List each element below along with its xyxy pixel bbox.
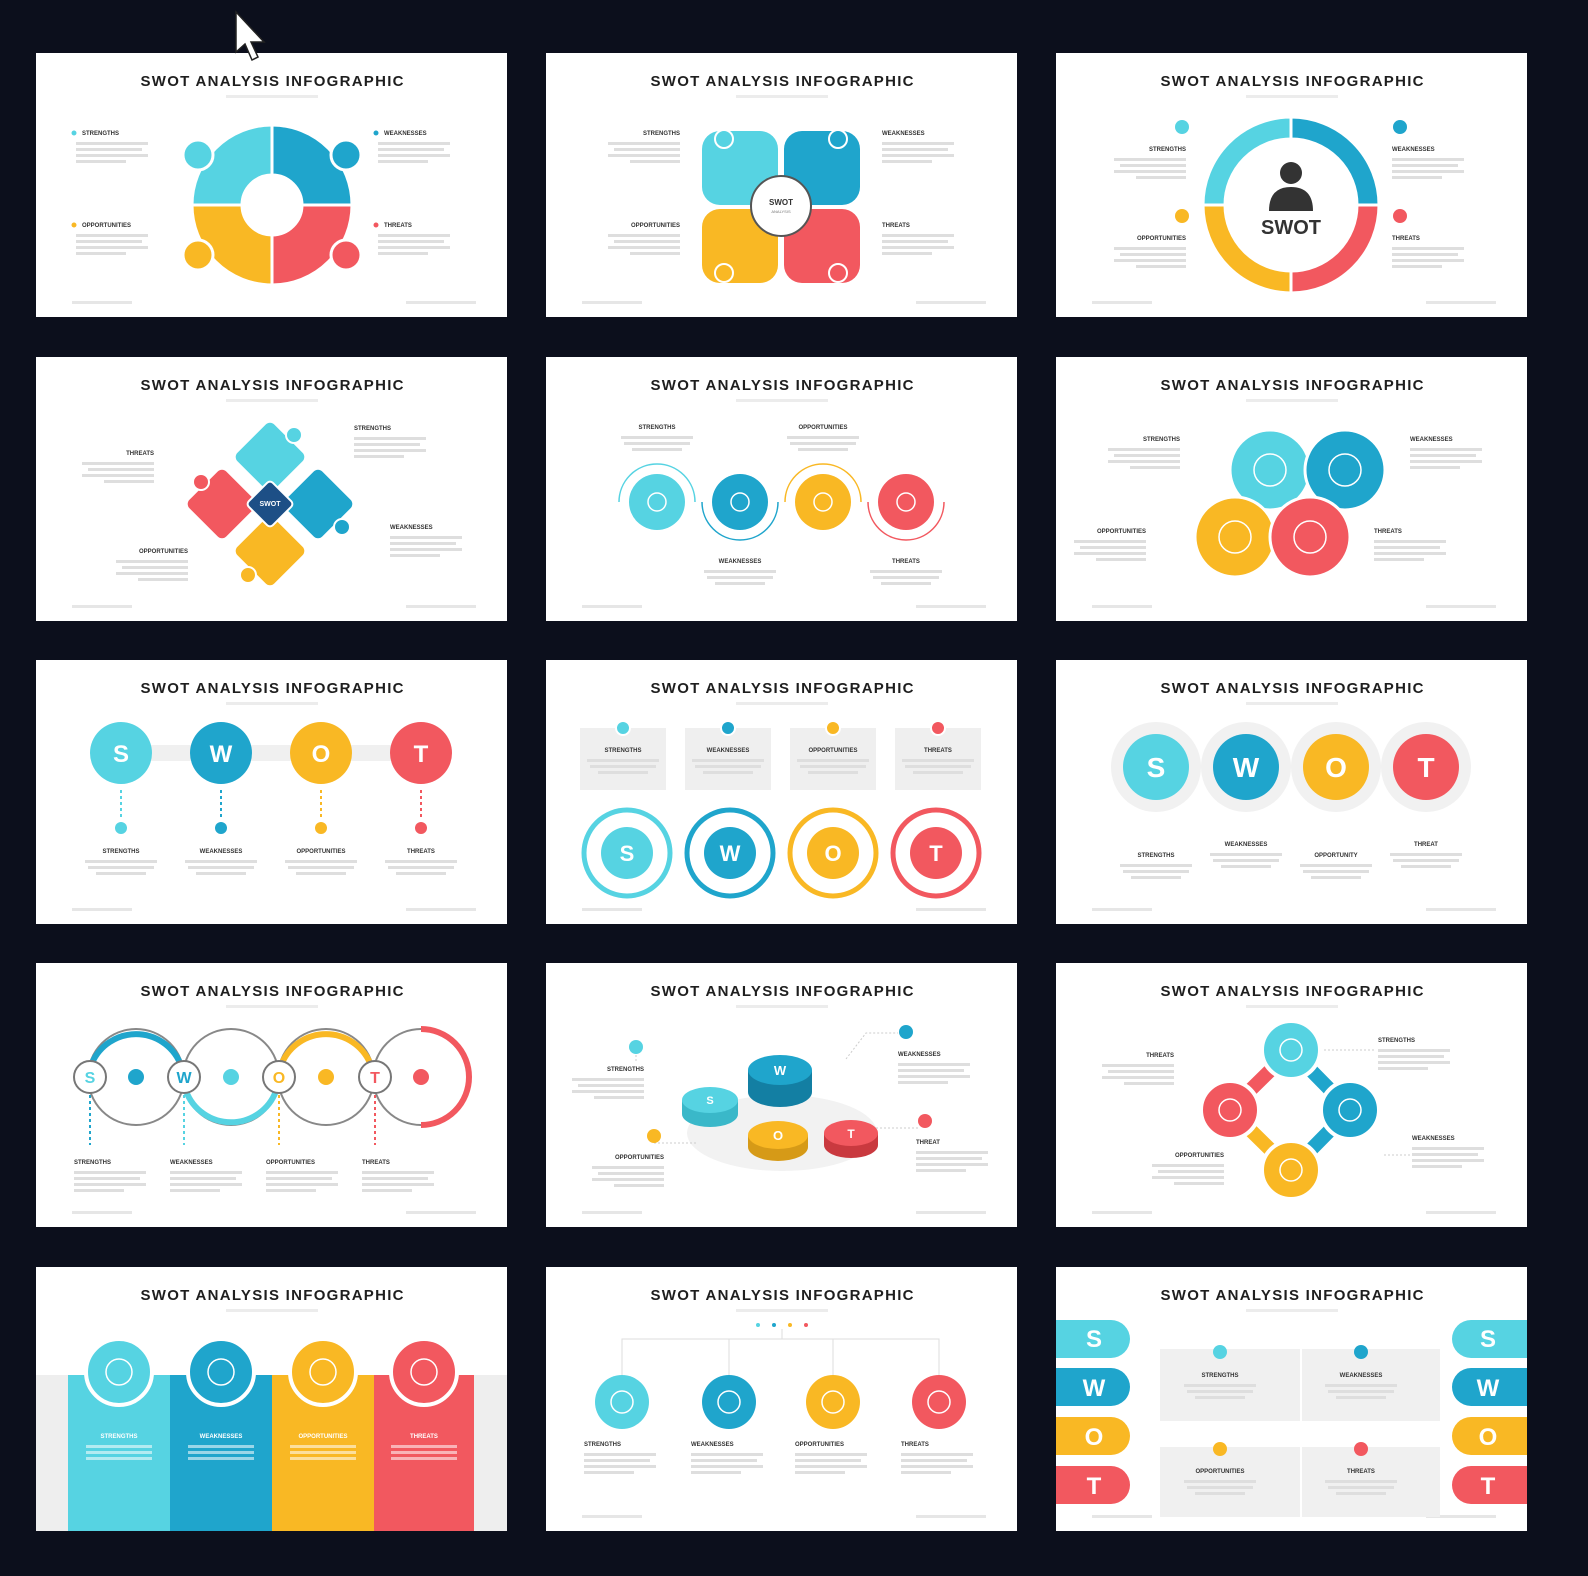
slide 3: ring with person: STRENGTHS <box>1149 147 1186 153</box>
slide 8: boxes and ring circles: OPPORTUNITIES <box>808 748 858 754</box>
slide 12: four connected circles: THREATS <box>1146 1053 1174 1059</box>
slide 13: colored columns <box>36 1267 507 1531</box>
slide 7: SWOT circles with dotted arrows: WEAKNESSES <box>200 849 242 855</box>
slide 9: SWOT circles with halo: WEAKNESSES <box>1225 842 1267 848</box>
slide 2: puzzle squares: SWOT <box>769 198 793 207</box>
slide 6: overlapping circles: OPPORTUNITIES <box>1097 529 1146 535</box>
slide 10: chained rings: S <box>85 1070 96 1087</box>
slide 9: SWOT circles with halo: STRENGTHS <box>1137 853 1175 859</box>
slide 12: four connected circles: SWOT ANALYSIS INFOGRAPHIC <box>1160 983 1424 1000</box>
slide 11: 3D coins: THREAT <box>916 1140 940 1146</box>
slide 15: pills and boxes: O <box>1479 1424 1497 1451</box>
slide 8: boxes and ring circles: WEAKNESSES <box>707 748 749 754</box>
slide 9: SWOT circles with halo: SWOT ANALYSIS INFOGRAPHIC <box>1160 680 1424 697</box>
slide 11: 3D coins: T <box>847 1127 855 1141</box>
slide 2: puzzle squares: THREATS <box>882 223 910 229</box>
slide 14: tree circles: WEAKNESSES <box>691 1442 734 1448</box>
slide 10: chained rings: SWOT ANALYSIS INFOGRAPHIC <box>140 983 404 1000</box>
slide 7: SWOT circles with dotted arrows: W <box>210 741 233 768</box>
slide 1: donut quadrants: SWOT ANALYSIS INFOGRAPHIC <box>140 73 404 90</box>
slide 6: overlapping circles: STRENGTHS <box>1143 437 1180 443</box>
slide 11: 3D coins <box>546 963 1017 1227</box>
slide 8: boxes and ring circles: SWOT ANALYSIS INFOGRAPHIC <box>650 680 914 697</box>
slide 11: 3D coins: SWOT ANALYSIS INFOGRAPHIC <box>650 983 914 1000</box>
slide 6: overlapping circles: WEAKNESSES <box>1410 437 1453 443</box>
slide 15: pills and boxes: S <box>1086 1326 1102 1353</box>
slide 15: pills and boxes: OPPORTUNITIES <box>1195 1469 1245 1475</box>
slide 6: overlapping circles: SWOT ANALYSIS INFOGRAPHIC <box>1160 377 1424 394</box>
slide 9: SWOT circles with halo: W <box>1233 752 1260 783</box>
slide 13: colored columns: STRENGTHS <box>100 1434 138 1440</box>
slide 9: SWOT circles with halo: S <box>1147 752 1165 783</box>
slide 1: donut quadrants <box>36 53 507 317</box>
slide 10: chained rings: T <box>370 1070 380 1087</box>
slide 12: four connected circles: WEAKNESSES <box>1412 1136 1455 1142</box>
slide 1: donut quadrants: OPPORTUNITIES <box>82 223 131 229</box>
slide 8: boxes and ring circles <box>546 660 1017 924</box>
slide 14: tree circles: THREATS <box>901 1442 929 1448</box>
slide 4: diamond: SWOT ANALYSIS INFOGRAPHIC <box>140 377 404 394</box>
slide 10: chained rings: W <box>176 1070 192 1087</box>
slide 11: 3D coins: STRENGTHS <box>607 1067 644 1073</box>
slide 7: SWOT circles with dotted arrows: T <box>414 741 429 768</box>
slide 8: boxes and ring circles: STRENGTHS <box>604 748 642 754</box>
slide 6: overlapping circles <box>1056 357 1527 621</box>
slide 4: diamond: OPPORTUNITIES <box>139 549 188 555</box>
slide 5: circles timeline: WEAKNESSES <box>719 559 761 565</box>
slide 2: puzzle squares: STRENGTHS <box>643 131 680 137</box>
slide 4: diamond: THREATS <box>126 451 154 457</box>
slide 10: chained rings: O <box>273 1070 285 1087</box>
slide 12: four connected circles <box>1056 963 1527 1227</box>
slide 9: SWOT circles with halo: T <box>1417 752 1435 783</box>
slide 1: donut quadrants: WEAKNESSES <box>384 131 427 137</box>
slide 13: colored columns: THREATS <box>410 1434 438 1440</box>
slide 8: boxes and ring circles: THREATS <box>924 748 952 754</box>
slide 15: pills and boxes: SWOT ANALYSIS INFOGRAPHIC <box>1160 1287 1424 1304</box>
slide 2: puzzle squares <box>546 53 1017 317</box>
slide 3: ring with person: OPPORTUNITIES <box>1137 236 1186 242</box>
slide 7: SWOT circles with dotted arrows: SWOT ANALYSIS INFOGRAPHIC <box>140 680 404 697</box>
slide 8: boxes and ring circles: S <box>620 841 634 866</box>
slide 15: pills and boxes: T <box>1481 1473 1496 1500</box>
slide 15: pills and boxes: O <box>1085 1424 1103 1451</box>
slide 13: colored columns: SWOT ANALYSIS INFOGRAPHIC <box>140 1287 404 1304</box>
slide 9: SWOT circles with halo: THREAT <box>1414 842 1438 848</box>
slide 7: SWOT circles with dotted arrows: STRENGTHS <box>102 849 140 855</box>
slide 8: boxes and ring circles: T <box>929 841 943 866</box>
icon: mouse cursor <box>236 12 264 60</box>
slide 15: pills and boxes <box>1056 1267 1527 1531</box>
slide 8: boxes and ring circles: W <box>720 841 741 866</box>
slide 1: donut quadrants: THREATS <box>384 223 412 229</box>
slide 5: circles timeline: OPPORTUNITIES <box>798 425 848 431</box>
slide 14: tree circles: STRENGTHS <box>584 1442 621 1448</box>
slide 9: SWOT circles with halo <box>1056 660 1527 924</box>
slide 7: SWOT circles with dotted arrows <box>36 660 507 924</box>
slide 10: chained rings: OPPORTUNITIES <box>266 1160 315 1166</box>
slide 15: pills and boxes: STRENGTHS <box>1201 1373 1239 1379</box>
slide 10: chained rings: WEAKNESSES <box>170 1160 213 1166</box>
slide 11: 3D coins: W <box>774 1063 787 1078</box>
slide 7: SWOT circles with dotted arrows: O <box>312 741 330 768</box>
slide 13: colored columns: OPPORTUNITIES <box>298 1434 348 1440</box>
slide 12: four connected circles: STRENGTHS <box>1378 1038 1415 1044</box>
slide 11: 3D coins: WEAKNESSES <box>898 1052 941 1058</box>
slide 14: tree circles: SWOT ANALYSIS INFOGRAPHIC <box>650 1287 914 1304</box>
slide 8: boxes and ring circles: O <box>824 841 842 866</box>
slide 13: colored columns: WEAKNESSES <box>200 1434 242 1440</box>
slide 15: pills and boxes: S <box>1480 1326 1496 1353</box>
slide 11: 3D coins: S <box>706 1095 714 1107</box>
slide 4: diamond: STRENGTHS <box>354 426 391 432</box>
slide 6: overlapping circles: THREATS <box>1374 529 1402 535</box>
slide 12: four connected circles: OPPORTUNITIES <box>1175 1153 1224 1159</box>
slide 7: SWOT circles with dotted arrows: S <box>113 741 129 768</box>
slide 3: ring with person <box>1056 53 1527 317</box>
slide 7: SWOT circles with dotted arrows: THREATS <box>407 849 435 855</box>
slide 7: SWOT circles with dotted arrows: OPPORTUNITIES <box>296 849 346 855</box>
slide 10: chained rings: THREATS <box>362 1160 390 1166</box>
slide 15: pills and boxes: W <box>1083 1375 1106 1402</box>
slide 4: diamond <box>36 357 507 621</box>
slide 2: puzzle squares: ANALYSIS <box>771 209 791 214</box>
slide 1: donut quadrants: STRENGTHS <box>82 131 119 137</box>
slide 11: 3D coins: O <box>773 1128 783 1143</box>
slide 3: ring with person: SWOT <box>1261 217 1321 239</box>
slide 3: ring with person: THREATS <box>1392 236 1420 242</box>
slide 2: puzzle squares: WEAKNESSES <box>882 131 925 137</box>
slide 15: pills and boxes: THREATS <box>1347 1469 1375 1475</box>
slide 4: diamond: SWOT <box>260 501 281 508</box>
slide 9: SWOT circles with halo: OPPORTUNITY <box>1314 853 1358 859</box>
slide 5: circles timeline: STRENGTHS <box>638 425 676 431</box>
slide 14: tree circles <box>546 1267 1017 1531</box>
slide 14: tree circles: OPPORTUNITIES <box>795 1442 844 1448</box>
slide 2: puzzle squares: SWOT ANALYSIS INFOGRAPHIC <box>650 73 914 90</box>
slide 5: circles timeline: THREATS <box>892 559 920 565</box>
slide 15: pills and boxes: T <box>1087 1473 1102 1500</box>
slide 5: circles timeline <box>546 357 1017 621</box>
slide 10: chained rings: STRENGTHS <box>74 1160 111 1166</box>
slide 10: chained rings <box>36 963 507 1227</box>
slide 4: diamond: WEAKNESSES <box>390 525 433 531</box>
slide 15: pills and boxes: W <box>1477 1375 1500 1402</box>
slide 15: pills and boxes: WEAKNESSES <box>1340 1373 1382 1379</box>
slide 5: circles timeline: SWOT ANALYSIS INFOGRAPHIC <box>650 377 914 394</box>
slide 9: SWOT circles with halo: O <box>1325 752 1347 783</box>
slide 2: puzzle squares: OPPORTUNITIES <box>631 223 680 229</box>
slide 11: 3D coins: OPPORTUNITIES <box>615 1155 664 1161</box>
slide 3: ring with person: WEAKNESSES <box>1392 147 1435 153</box>
slide 3: ring with person: SWOT ANALYSIS INFOGRAPHIC <box>1160 73 1424 90</box>
